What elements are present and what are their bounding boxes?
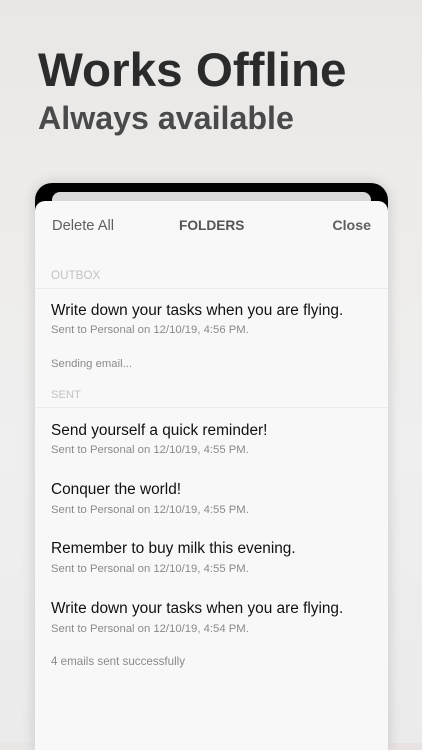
bottom strip: right (388, 743, 422, 750)
sent message 4 (51, 600, 343, 635)
panel: folders sheet (35, 201, 388, 750)
sent message 3: Sent to Personal on 12/10/19, 4:55 PM. (51, 563, 249, 575)
outbox message: Write down your tasks when you are flying. (51, 302, 343, 319)
heading: folders: FOLDERS (179, 218, 244, 233)
sent message 1 (51, 422, 267, 456)
subtitle: Always available (38, 100, 294, 136)
sent message 3 (51, 540, 296, 575)
button: close: Close (332, 218, 371, 234)
outbox message: Sent to Personal on 12/10/19, 4:56 PM. (51, 324, 249, 336)
back sheet (52, 192, 371, 222)
sent message 4: Write down your tasks when you are flying. (51, 600, 343, 617)
title: Works Offline (38, 44, 347, 97)
button: delete all: Delete All (52, 218, 114, 234)
section label: sent: SENT (51, 389, 81, 401)
sent message 2: Conquer the world! (51, 481, 181, 498)
sent message 1: Sent to Personal on 12/10/19, 4:55 PM. (51, 444, 249, 456)
outbox message (51, 302, 343, 336)
sent message 2 (51, 481, 249, 516)
sent message 4: Sent to Personal on 12/10/19, 4:54 PM. (51, 623, 249, 635)
status: emails sent: 4 emails sent successfully (51, 655, 185, 668)
phone frame (35, 183, 388, 750)
sent message 3: Remember to buy milk this evening. (51, 540, 296, 557)
bottom strip: left (0, 742, 35, 750)
section label: outbox: OUTBOX (51, 269, 100, 282)
sent message 2: Sent to Personal on 12/10/19, 4:55 PM. (51, 504, 249, 516)
sent message 1: Send yourself a quick reminder! (51, 422, 267, 439)
status: sending: Sending email... (51, 358, 132, 370)
